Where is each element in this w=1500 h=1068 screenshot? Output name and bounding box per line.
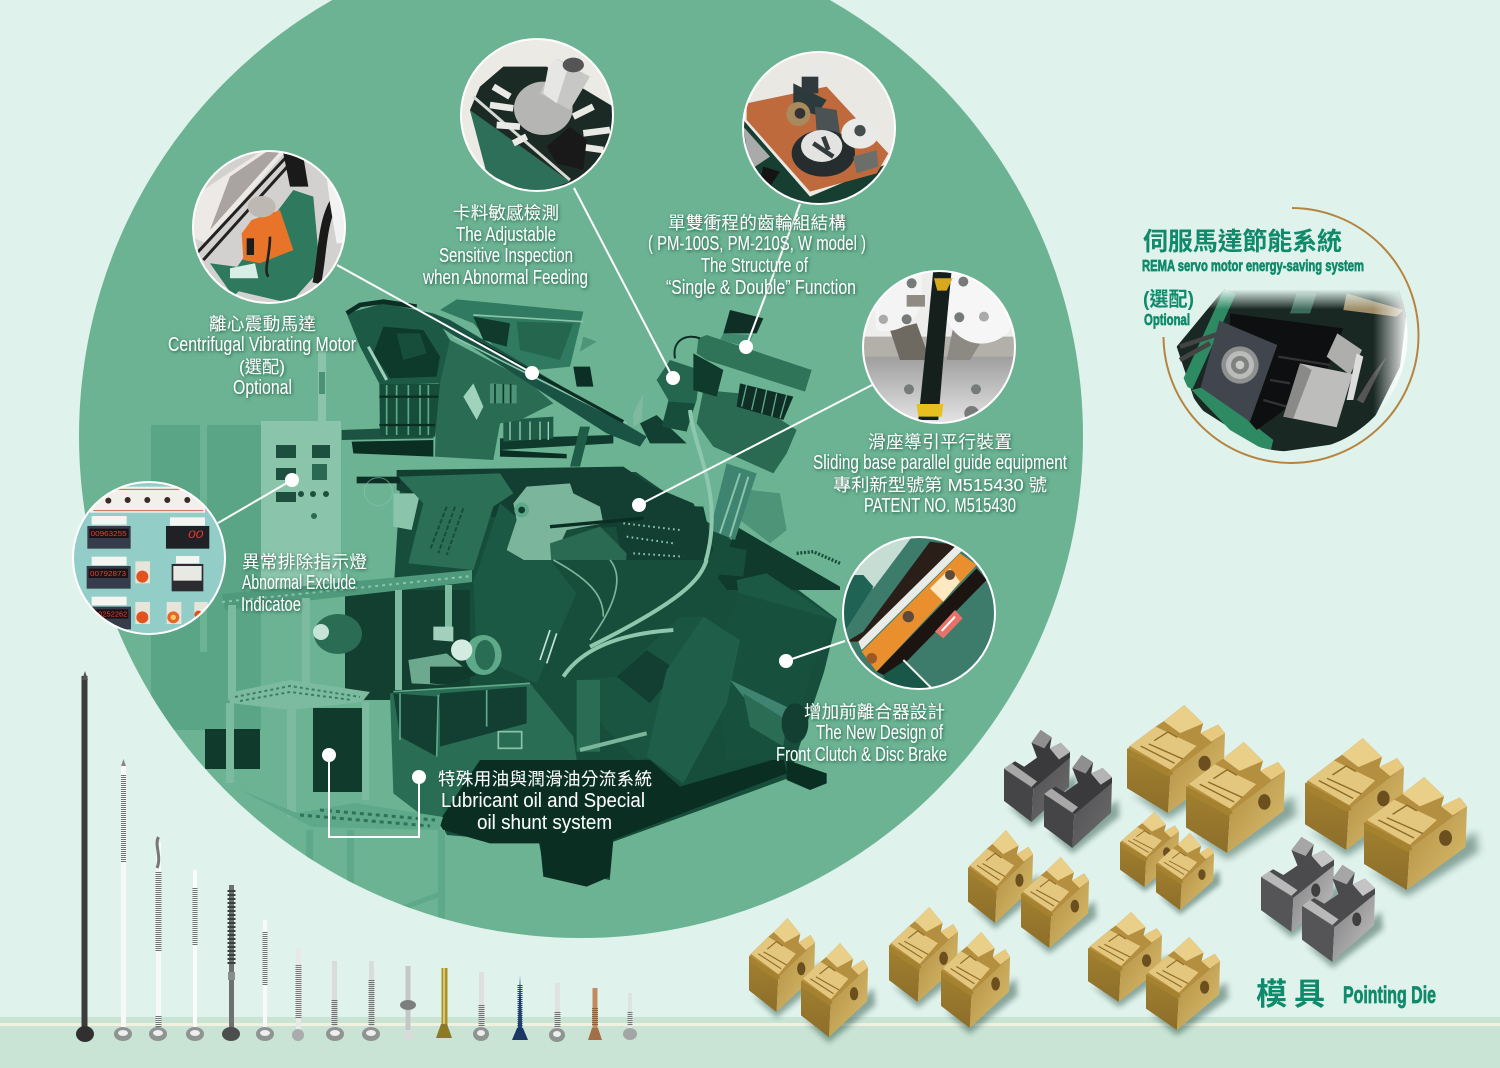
- label: vibrating motor: Centrifugal Vibrating Motor: [168, 334, 356, 356]
- panel: servo motor system: [1142, 208, 1418, 463]
- servo subheading: REMA servo motor energy-saving system: [1142, 258, 1364, 275]
- photo: sliding base guide: [860, 268, 1020, 428]
- label: vibrating motor: [168, 314, 356, 399]
- upper machine: feeder bowl, chute, head: [342, 299, 840, 590]
- photo: indicator panel: 00963255: [91, 531, 127, 538]
- product row: screws: [76, 671, 637, 1042]
- label: clutch and brake: The New Design of: [816, 722, 943, 744]
- servo arc: [1164, 208, 1418, 463]
- servo photo: [1177, 289, 1410, 453]
- die pair: large gold right: [1305, 738, 1478, 897]
- screw 13: [512, 975, 528, 1040]
- front bowl: [347, 302, 450, 437]
- control cabinet: [151, 350, 341, 730]
- side plate: [473, 560, 577, 683]
- lower machine: body, base, stand: [390, 560, 837, 887]
- screw 16: [623, 993, 637, 1040]
- die pair: large gold: [1127, 705, 1296, 860]
- photo: indicator panel: [70, 478, 230, 638]
- work table with pumps: [222, 570, 472, 700]
- screw 14: [549, 983, 565, 1042]
- label: abnormal indicator: Abnormal Exclude: [242, 572, 356, 594]
- photo: gear structure: [740, 49, 900, 210]
- servo optional note: (選配): [1143, 288, 1194, 311]
- label: vibrating motor: 離心震動馬達: [209, 314, 316, 334]
- screw 9: [362, 961, 380, 1041]
- motor guard and mechanism: [478, 410, 714, 570]
- die pair: dark steel: [1004, 730, 1120, 854]
- label: lubricant oil system: 特殊用油與潤滑油分流系統: [438, 769, 652, 789]
- label: sensitive inspection: The Adjustable: [456, 224, 556, 246]
- screw 12: [473, 972, 489, 1041]
- label: sensitive inspection: Sensitive Inspection: [439, 245, 573, 267]
- screw 7: [292, 948, 304, 1041]
- right housing: [617, 594, 832, 790]
- die pair: left gold: [749, 918, 875, 1043]
- die pair: steel right: [1261, 837, 1383, 968]
- main top plate: [357, 467, 703, 530]
- label: lubricant oil system: [438, 769, 652, 834]
- servo heading: 伺服馬達節能系統: [1143, 228, 1342, 256]
- label: gear structure: 單雙衝程的齒輪組結構: [668, 213, 846, 233]
- screw 3: [149, 837, 167, 1041]
- screw 2: [114, 759, 132, 1041]
- die pair: lower gold: [1088, 912, 1228, 1036]
- column: [713, 464, 756, 576]
- bottom band: [0, 1017, 1500, 1068]
- slotted plate: [398, 473, 513, 570]
- screw 5: [222, 885, 240, 1041]
- chute: [433, 313, 687, 447]
- large green circle: [79, 0, 1083, 938]
- caption: pointing die: 模具: [1256, 977, 1325, 1012]
- product group: pointing dies: [749, 705, 1478, 1043]
- label: sliding base guide: PATENT NO. M515430: [864, 495, 1016, 517]
- photo: indicator panel: 00252262: [94, 612, 127, 619]
- label: vibrating motor: (選配): [239, 357, 285, 377]
- screw 6: [256, 920, 274, 1041]
- label: sensitive inspection: 卡料敏感檢測: [453, 203, 559, 223]
- label: clutch and brake: [776, 702, 947, 766]
- label: sliding base guide: 滑座導引平行裝置: [868, 432, 1012, 452]
- label: abnormal indicator: [241, 552, 367, 616]
- label: lubricant oil system: oil shunt system: [477, 812, 612, 834]
- photo: indicator panel: 00792873: [90, 571, 126, 578]
- die pair: slotted gold: [889, 907, 1018, 1034]
- pump stand: [390, 680, 647, 827]
- shelves and struts: [342, 417, 613, 467]
- photo: sensitive inspection: [458, 36, 618, 196]
- label: sliding base guide: Sliding base parallel guide equipment: [813, 452, 1067, 474]
- servo optional note: Optional: [1144, 312, 1190, 329]
- photo: indicator panel: 00: [188, 529, 204, 541]
- screw 15: [588, 988, 602, 1040]
- machine photo: [151, 299, 840, 922]
- photo: vibrating motor: [190, 148, 350, 308]
- label: vibrating motor: Optional: [233, 377, 292, 399]
- screw 11: [436, 968, 452, 1038]
- head block: [657, 310, 812, 473]
- label: abnormal indicator: 異常排除指示燈: [242, 552, 367, 572]
- servo optional note: [1143, 288, 1194, 329]
- caption: pointing die: [1256, 977, 1436, 1012]
- label: sensitive inspection: [422, 203, 588, 289]
- machine silhouette: [393, 472, 837, 880]
- centre housing: [550, 559, 836, 640]
- label: abnormal indicator: Indicatoe: [241, 594, 301, 616]
- label: sensitive inspection: when Abnormal Feeding: [422, 267, 588, 289]
- pump and gauge: [408, 627, 502, 685]
- screw 1: [76, 671, 94, 1042]
- screw 10: [400, 966, 416, 1040]
- screw 8: [326, 961, 344, 1041]
- caption: pointing die: Pointing Die: [1343, 982, 1436, 1009]
- label: sliding base guide: 專利新型號第 M515430 號: [833, 475, 1047, 495]
- label: clutch and brake: Front Clutch & Disc Brake: [776, 744, 947, 766]
- label: clutch and brake: 增加前離合器設計: [804, 702, 945, 722]
- step stool: [205, 680, 445, 922]
- die pair: mid gold: [968, 830, 1097, 953]
- right conveyor: [713, 490, 840, 590]
- label: gear structure: “Single & Double” Function: [666, 277, 856, 299]
- label: lubricant oil system: Lubricant oil and Special: [441, 790, 645, 812]
- label: sliding base guide: [813, 432, 1067, 517]
- label: gear structure: The Structure of: [701, 255, 808, 277]
- black base: [437, 757, 787, 887]
- label: gear structure: [648, 213, 866, 299]
- leader lines and markers: [218, 188, 872, 837]
- label: gear structure: ( PM-100S, PM-210S, W model ): [648, 233, 866, 255]
- screw 4: [186, 870, 204, 1041]
- die pair: small gold: [1120, 812, 1220, 915]
- back bowl: [440, 299, 597, 370]
- pedestal: [435, 340, 553, 460]
- hoses: [563, 560, 707, 677]
- photo: clutch and brake: [840, 534, 1000, 694]
